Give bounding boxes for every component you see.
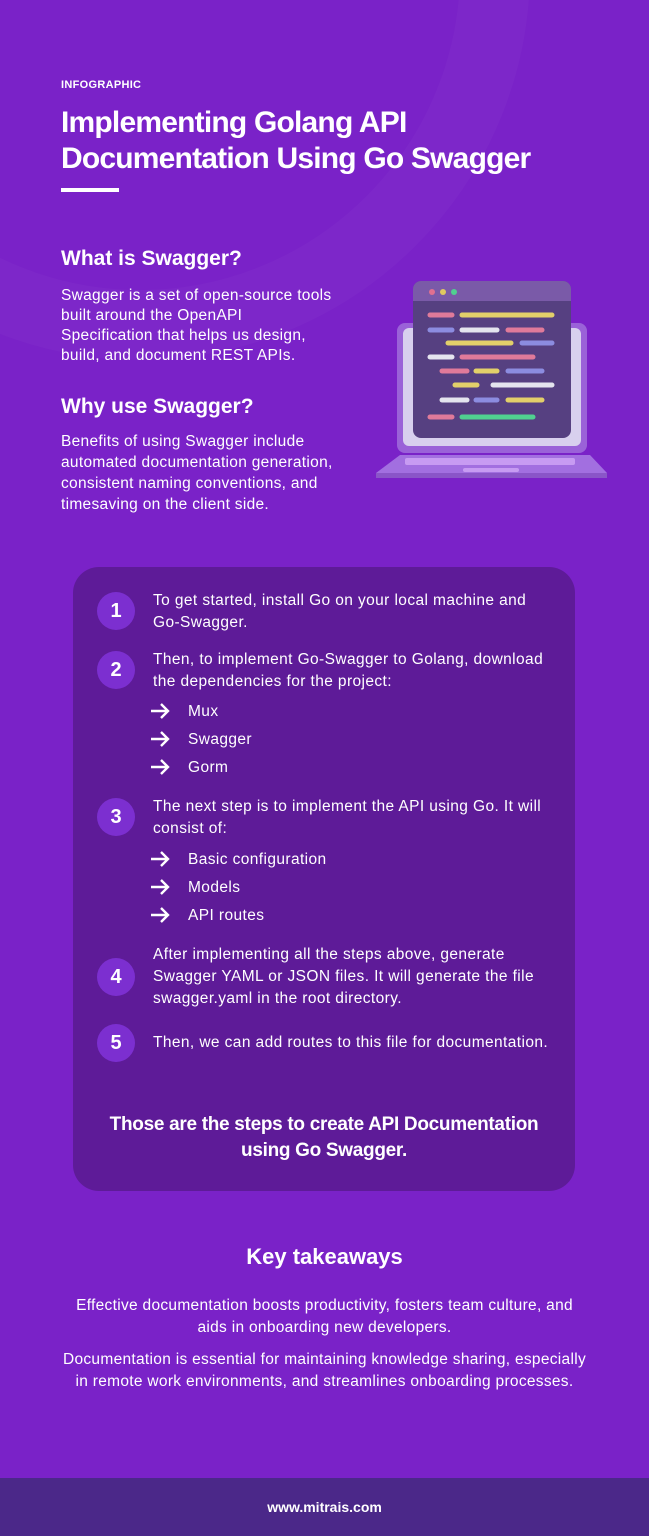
step 4: swagger.yaml in the root directory.: [153, 990, 402, 1007]
closing statement: [110, 1114, 538, 1161]
step 2: Mux: [188, 703, 218, 720]
icon: laptop with code: [376, 281, 607, 478]
step 2: Swagger: [188, 731, 252, 748]
text: what is swagger: Swagger is a set of open-source tools: [61, 287, 331, 304]
step 3: 3: [110, 806, 122, 828]
title: [61, 106, 531, 175]
step 1: 1: [110, 600, 122, 622]
step 4: Swagger YAML or JSON files. It will generate the file: [153, 968, 534, 985]
title underline: [61, 188, 119, 192]
step 4: After implementing all the steps above, generate: [153, 946, 505, 963]
step 3: Models: [188, 879, 240, 896]
heading: what is swagger: What is Swagger?: [61, 247, 242, 270]
text: what is swagger: [61, 287, 331, 364]
title: Implementing Golang API: [61, 106, 407, 139]
step 3: [97, 798, 541, 924]
text: what is swagger: build, and document REST APIs.: [61, 347, 295, 364]
footer: www.mitrais.com: [267, 1499, 382, 1515]
heading: why use swagger: Why use Swagger?: [61, 395, 254, 418]
text: takeaways: Documentation is essential for maintaining knowledge sharing, especially: [63, 1351, 586, 1368]
text: why use swagger: [61, 433, 333, 513]
step 1: [97, 592, 526, 631]
step 1: Go-Swagger.: [153, 614, 248, 631]
step 2: 2: [110, 659, 122, 681]
text: why use swagger: timesaving on the client side.: [61, 496, 269, 513]
footer: [0, 1478, 649, 1536]
heading: key takeaways: Key takeaways: [246, 1244, 403, 1269]
step 4: [97, 946, 534, 1007]
step 1: To get started, install Go on your local machine and: [153, 592, 526, 609]
text: takeaways: Effective documentation boosts productivity, fosters team culture, and: [76, 1297, 573, 1314]
text: takeaways: aids in onboarding new developers.: [197, 1319, 452, 1336]
text: takeaways: in remote work environments, and streamlines onboarding processes.: [76, 1373, 573, 1390]
text: why use swagger: Benefits of using Swagger include: [61, 433, 304, 450]
step 3: Basic configuration: [188, 851, 327, 868]
text: why use swagger: automated documentation generation,: [61, 454, 333, 471]
text: what is swagger: Specification that helps us design,: [61, 327, 306, 344]
closing statement: Those are the steps to create API Documentation: [110, 1114, 538, 1135]
step 5: [97, 1024, 548, 1062]
label: infographic: INFOGRAPHIC: [61, 79, 141, 91]
step 3: The next step is to implement the API using Go. It will: [153, 798, 541, 815]
panel: steps: [73, 567, 575, 1191]
text: why use swagger: consistent naming conventions, and: [61, 475, 318, 492]
step 4: 4: [110, 966, 122, 988]
step 5: 5: [110, 1032, 122, 1054]
text: takeaways: [63, 1297, 586, 1390]
step 3: API routes: [188, 907, 264, 924]
step 2: Gorm: [188, 759, 228, 776]
step 2: [97, 651, 543, 776]
decorative arc: [0, 0, 530, 360]
step 5: Then, we can add routes to this file for documentation.: [153, 1034, 548, 1051]
text: what is swagger: built around the OpenAPI: [61, 307, 242, 324]
step 2: Then, to implement Go-Swagger to Golang, download: [153, 651, 543, 668]
step 2: the dependencies for the project:: [153, 673, 392, 690]
step 3: consist of:: [153, 820, 227, 837]
title: Documentation Using Go Swagger: [61, 142, 530, 175]
closing statement: using Go Swagger.: [241, 1140, 407, 1161]
